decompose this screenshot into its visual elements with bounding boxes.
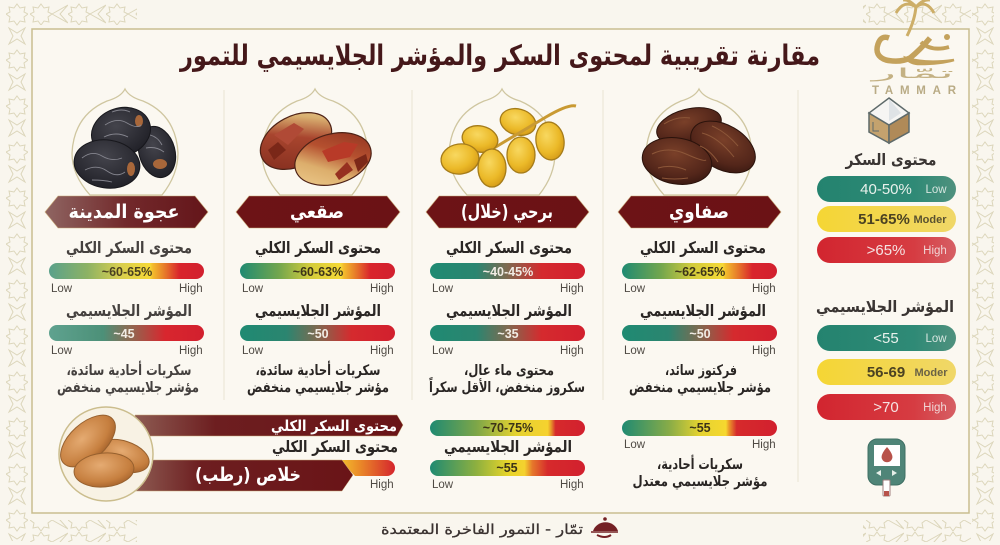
text: description: فركتوز سائد، [665, 363, 737, 379]
column: Ajwa [45, 89, 208, 396]
icon: safawi dates [639, 89, 764, 195]
legend: sugar content: Moder [914, 214, 947, 226]
text: GI label: المؤشر الجلايسيمي [640, 301, 766, 321]
bar: sugar 40-45: High [560, 283, 584, 295]
banner: top sugar label: محتوى السكر الكلي [271, 417, 397, 435]
icon: barhi dates [439, 89, 576, 195]
bar: GI 45: Low [51, 345, 73, 357]
bar: GI 45: ~45 [113, 327, 135, 341]
text: GI label: المؤشر الجلايسيمي [66, 301, 192, 321]
text: description [247, 361, 389, 396]
banner: Barhi (Khalal): برحي (خلال) [461, 201, 553, 223]
legend: glycemic index: >70 [873, 399, 899, 416]
text: description: سكروز منخفض، الأقل سكراً [429, 377, 585, 396]
bar: GI 35: High [560, 345, 584, 357]
text: description: مؤشر جلايسيمي معتدل [632, 474, 768, 490]
legend: glycemic index: Low [925, 333, 947, 345]
bar: sugar 60-65: ~60-65% [102, 265, 152, 279]
banner: Ajwa Al-Madinah [45, 196, 208, 228]
text: GI label: المؤشر الجلايسيمي [444, 437, 572, 457]
banner: Ajwa Al-Madinah: عجوة المدينة [68, 201, 180, 223]
bar: rutab GI 55: Low [432, 479, 454, 491]
bar: sugar 60-63: High [370, 283, 394, 295]
bar: rutab GI 55: ~55 [496, 461, 518, 475]
bar: sugar 40-45 [430, 263, 585, 295]
bar: rutab sugar 70-75: ~70-75% [483, 421, 533, 435]
icon: serving dome [591, 517, 618, 537]
column: Barhi [426, 89, 589, 491]
title: مقارنة تقريبية لمحتوى السكر والمؤشر الجلايسيمي للتمور [178, 39, 820, 72]
bar: GI 50 [622, 325, 777, 357]
bar: rutab GI 55: High [560, 479, 584, 491]
bar: sugar 62-65 [622, 263, 777, 295]
text: GI label: المؤشر الجلايسيمي [255, 301, 381, 321]
bar: high segment [340, 460, 395, 491]
banner: Safawi [618, 196, 781, 228]
banner: Sukkari [236, 196, 400, 228]
legend: glycemic index [816, 297, 956, 420]
text: sugar label: محتوى السكر الكلي [446, 238, 572, 258]
legend: sugar content [817, 150, 956, 263]
banner: Khalas (Rutab): خلاص (رطب) [195, 464, 301, 486]
text: description [429, 363, 585, 396]
legend: glycemic index: Moder [914, 367, 948, 379]
bar: rutab sugar 70-75 [430, 420, 585, 436]
bar: sugar 60-65: High [179, 283, 203, 295]
bar: sugar 60-63: Low [242, 283, 264, 295]
legend: sugar content: 51-65% [858, 211, 910, 228]
legend: glycemic index: 56-69 [867, 364, 905, 381]
text: description [629, 363, 771, 396]
bar: GI 35: ~35 [497, 327, 519, 341]
legend: glycemic index: High [923, 402, 947, 414]
text: description: سكريات أحادية سائدة، [256, 361, 380, 379]
footer: تمّار - التمور الفاخرة المعتمدة [381, 522, 583, 538]
bar: GI 50: High [752, 345, 776, 357]
logo: Tammar: تمّار [868, 66, 954, 82]
legend: sugar content: >65% [867, 242, 905, 259]
bar: bottom GI 55 [622, 420, 777, 451]
column: Safawi [618, 89, 781, 490]
logo: Tammar [868, 0, 957, 97]
bar: GI 50: ~50 [307, 327, 329, 341]
panel: Khalas rutab row [51, 406, 403, 501]
legend: sugar content: 40-50% [860, 181, 912, 198]
icon: sukkari dates [251, 89, 377, 195]
bar: sugar 62-65: High [752, 283, 776, 295]
text: description: مؤشر جلايسيمي منخفض [629, 380, 771, 396]
text: description: سكريات أحادية سائدة، [66, 361, 192, 379]
text: description: مؤشر جلايسيمي منخفض [247, 380, 389, 396]
legend: glycemic index: <55 [873, 330, 899, 347]
legend: sugar content: High [923, 245, 947, 257]
logo: Tammar: TAMMAR [872, 85, 957, 97]
banner: top sugar label [135, 415, 403, 436]
bar: GI 50: Low [242, 345, 264, 357]
text: sugar label: محتوى السكر الكلي [66, 238, 192, 258]
text: description [632, 455, 768, 490]
bar: rutab GI 55 [430, 460, 585, 491]
text: sugar label: محتوى السكر الكلي [640, 238, 766, 258]
icon: sugar box [869, 98, 909, 143]
bar: sugar 62-65: ~62-65% [675, 265, 725, 279]
text: description: محتوى ماء عال، [464, 363, 554, 379]
legend: sugar content: محتوى السكر [845, 150, 936, 169]
text: description [57, 361, 199, 396]
bar: GI 50: High [370, 345, 394, 357]
icon: ajwa dates [71, 89, 181, 195]
bar: sugar 40-45: Low [432, 283, 454, 295]
text: sugar label: محتوى السكر الكلي [272, 437, 398, 457]
text: description: مؤشر جلايسيمي منخفض [57, 380, 199, 396]
bar: GI 45 [49, 325, 204, 357]
banner: Barhi (Khalal) [426, 196, 589, 228]
bar: sugar 62-65: Low [624, 283, 646, 295]
text: description: سكريات أحادية، [657, 455, 743, 473]
text: GI label: المؤشر الجلايسيمي [446, 301, 572, 321]
bar: bottom GI 55: Low [624, 439, 646, 451]
bar: bottom GI 55: High [752, 439, 776, 451]
bar: GI 50: Low [624, 345, 646, 357]
banner: Sukkari: صقعي [290, 201, 344, 223]
footer [381, 517, 618, 538]
bar: GI 50 [240, 325, 395, 357]
bar: GI 45: High [179, 345, 203, 357]
bar: bottom GI 55: ~55 [689, 421, 711, 435]
icon: khalas dates [51, 406, 153, 501]
column: Sukkari [236, 89, 400, 396]
icon: glucose meter [868, 439, 905, 496]
bar: sugar 60-63: ~60-63% [293, 265, 343, 279]
bar: sugar 60-65 [49, 263, 204, 295]
banner: Safawi: صفاوي [669, 201, 729, 224]
bar: sugar 60-63 [240, 263, 395, 295]
bar: GI 50: ~50 [689, 327, 711, 341]
bar: sugar 60-65: Low [51, 283, 73, 295]
text: sugar label: محتوى السكر الكلي [255, 238, 381, 258]
bar: GI 35 [430, 325, 585, 357]
bar: GI 35: Low [432, 345, 454, 357]
legend: sugar content: Low [925, 184, 947, 196]
legend: glycemic index: المؤشر الجلايسيمي [816, 297, 954, 317]
bar: high segment: High [370, 479, 394, 491]
bar: sugar 40-45: ~40-45% [483, 265, 533, 279]
banner: Khalas (Rutab) [135, 460, 353, 491]
